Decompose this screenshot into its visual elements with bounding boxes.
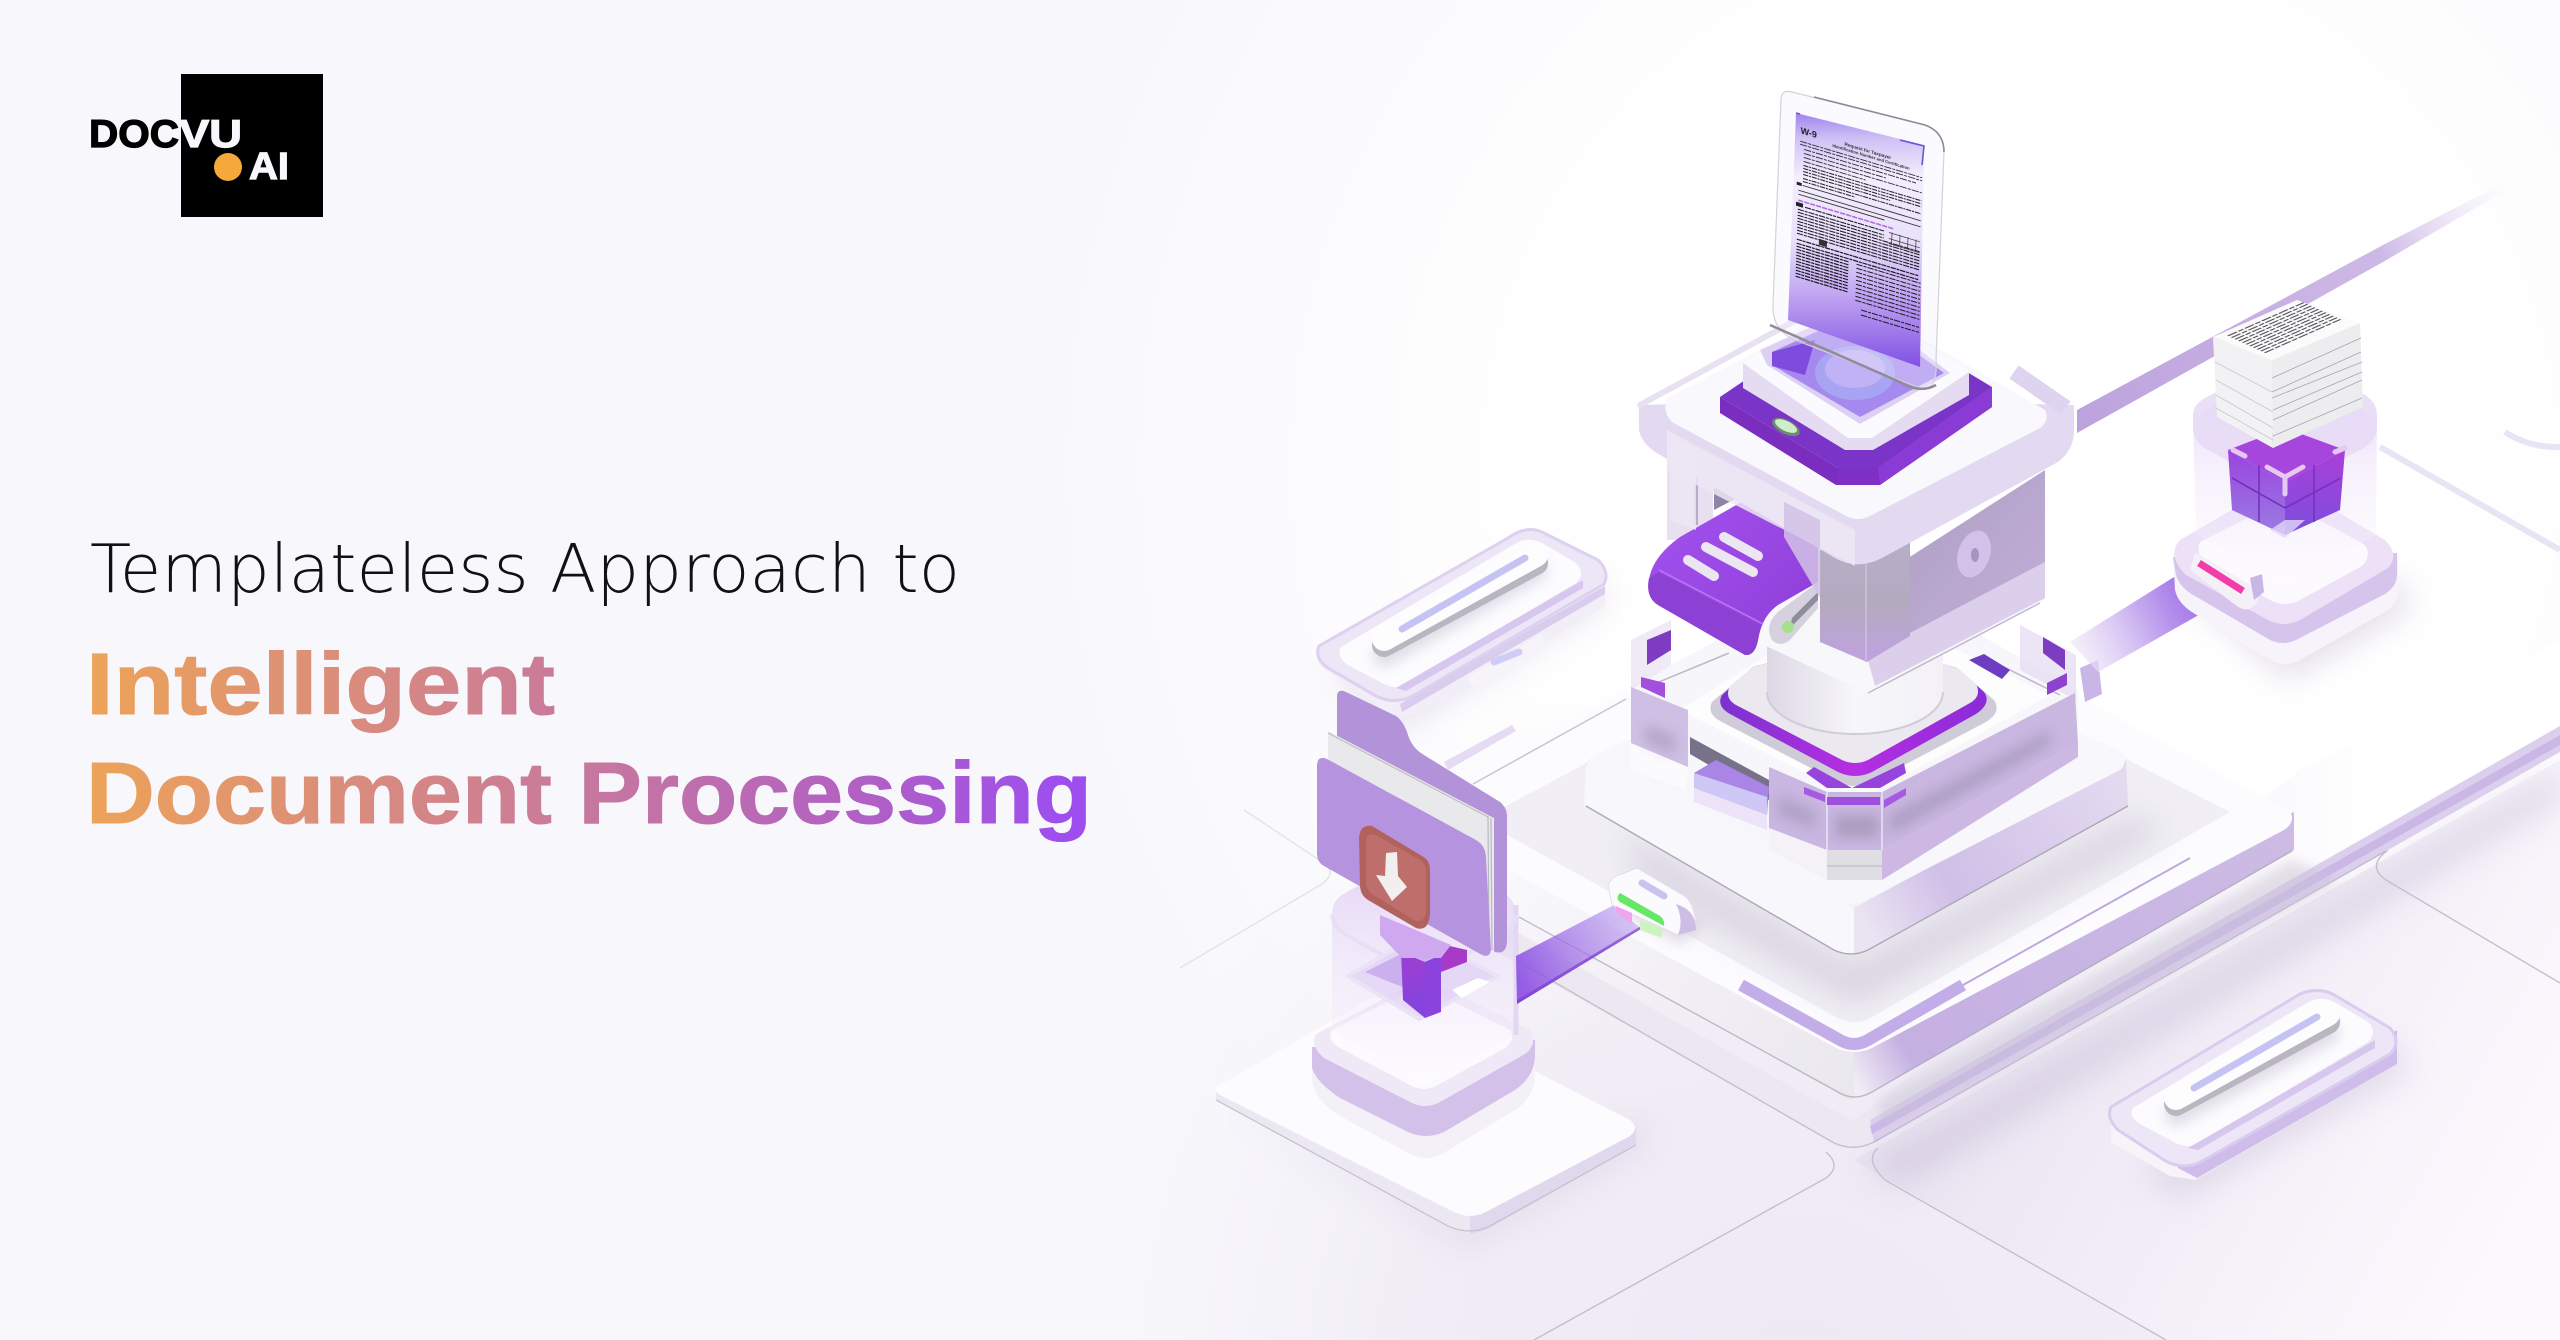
module base [2173,480,2398,664]
form content [1793,125,1925,332]
glass jar [1332,850,1516,1085]
logo [89,74,323,217]
module glass base [2110,990,2397,1180]
middle tier with frame [1410,572,2294,1100]
heading line two: Document Processing [86,745,1092,842]
module tab [1469,634,1545,688]
left-top pill module [1318,529,1610,730]
logo black square [181,74,323,217]
paper stripes [1688,537,1758,576]
drawer tray [1690,737,1769,830]
purple docking base [1720,305,1992,485]
folder back panel [1337,691,1507,952]
bottom-right pill module [2110,990,2410,1200]
top-right slab edge [2380,432,2560,550]
floor panel lines [1180,810,2560,1340]
platform shadow [1860,770,2560,1190]
glass bar on back-left edge [1444,725,1516,770]
logo wordmark: VU [179,113,242,156]
module pill [2176,1014,2328,1115]
front cage purple bracket [1804,763,1906,808]
cylinder column [1767,640,1943,734]
tower top glass plate [1639,288,2074,598]
subtitle line: Templateless Approach to [90,530,960,608]
adjustment knob [1951,526,1997,582]
purple column [1380,915,1467,1018]
folder front panel [1317,758,1491,956]
printer roller [1769,582,1818,644]
module glass base [1318,529,1606,718]
module shadow [2140,1040,2410,1200]
glass jar [2193,355,2377,585]
glass column front [1820,530,1910,662]
title block [86,530,1092,842]
folder papers [1328,731,1494,952]
logo wordmark: DOC [89,113,179,156]
cage block [1631,565,2078,880]
logo wordmark [89,113,289,188]
back cage brackets [1631,620,2076,700]
tier shading [1880,860,2340,1130]
green sensor chip [1608,868,1705,945]
printer base plate [1710,640,1997,786]
scanner glow ring [1815,346,1895,400]
main platform [1410,565,2560,1190]
floor plate [1215,997,1636,1234]
scanner head [2190,552,2264,610]
form content: W-9 [1800,125,1817,140]
download badge [1359,826,1430,929]
plate shadow [1220,1100,1650,1245]
purple cube [2228,428,2345,538]
logo orange dot [214,153,242,181]
form content: Request for Taxpayer [1845,141,1891,160]
glass tray inner [1348,935,1498,1019]
left data ribbon [1516,905,1641,1004]
status light [1769,414,1803,440]
logo wordmark: AI [249,146,289,188]
module shadow [1330,575,1610,730]
pedestal shading [1620,815,2165,1005]
folder module [1215,691,1650,1245]
module shadow [2185,580,2410,680]
right data ribbon connector [2070,562,2243,702]
tower lower block [1753,555,2045,693]
tower body right face [1905,470,2045,634]
printed purple paper [1648,500,1818,655]
cube module [2173,300,2410,680]
lilac base ring [1312,982,1535,1158]
glass document card [1770,91,1944,389]
lowest tier [1450,640,2560,1150]
front cage glass panels [1631,687,2078,850]
module pill [1384,555,1536,656]
form content: Identification Number and Certification [1832,143,1910,171]
heading line one: Intelligent [86,636,555,733]
W-9 form sheet [1788,113,1924,367]
top-right beam [2077,180,2510,433]
down arrow [1376,852,1407,901]
paper stack [2213,300,2363,448]
white scanner tray [1743,300,1969,450]
tower left leg [1667,455,1737,540]
stepped pedestal [1584,640,2128,955]
back-right purple chip [1969,654,2010,679]
